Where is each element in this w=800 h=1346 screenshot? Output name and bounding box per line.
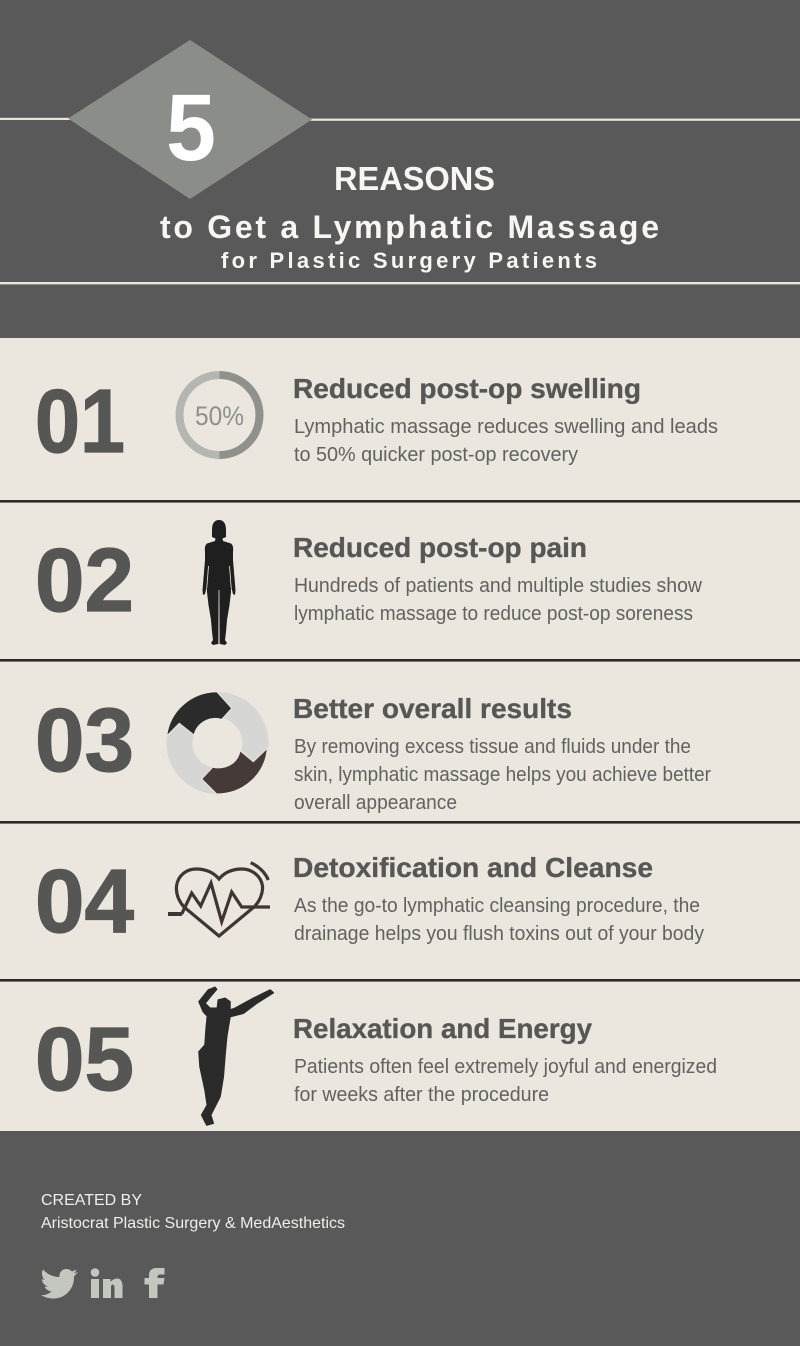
description: skin, lymphatic massage helps you achieve better: [294, 764, 711, 786]
reason 02: [35, 520, 703, 645]
reason 05: [35, 987, 717, 1125]
description: [294, 575, 703, 625]
credit text: [41, 1192, 345, 1232]
description: As the go-to lymphatic cleansing procedure, the: [294, 895, 700, 917]
number 02: 02: [35, 531, 134, 631]
description: drainage helps you flush toxins out of your body: [294, 923, 704, 945]
description: Lymphatic massage reduces swelling and leads: [294, 416, 718, 438]
title: to get a lymphatic massage: to Get a Lymphatic Massage: [160, 209, 659, 245]
description: By removing excess tissue and fluids under the: [294, 736, 691, 758]
description: [294, 895, 704, 945]
icon: circular arrows: [167, 692, 267, 794]
reason 03: [35, 691, 711, 814]
description: [294, 736, 711, 814]
heading: Reduced post-op pain: [293, 532, 587, 563]
icon: 50% progress ring: [180, 375, 260, 455]
description: Patients often feel extremely joyful and energized: [294, 1056, 717, 1078]
diamond badge: [68, 40, 312, 199]
number 01: 01: [35, 372, 125, 472]
icon: joyful figure silhouette: [199, 987, 273, 1125]
footer: [41, 1192, 345, 1298]
icon: linkedin: [91, 1268, 122, 1298]
credit text: Aristocrat Plastic Surgery & MedAesthetics: [41, 1215, 345, 1232]
icon: facebook: [144, 1268, 164, 1298]
big number 5: 5: [166, 75, 216, 181]
number 03: 03: [35, 691, 134, 791]
icon: female body silhouette: [202, 520, 236, 645]
content background: [0, 338, 800, 1131]
heading: Reduced post-op swelling: [293, 373, 641, 404]
reason 04: [35, 852, 704, 952]
description: lymphatic massage to reduce post-op soreness: [294, 603, 693, 625]
icon: 50% progress ring: 50%: [195, 401, 244, 431]
title: reasons: REASONS: [334, 160, 495, 197]
heading: Relaxation and Energy: [293, 1013, 592, 1044]
heading: Better overall results: [293, 693, 572, 724]
icon: twitter: [41, 1269, 78, 1298]
description: to 50% quicker post-op recovery: [294, 444, 578, 466]
reason 01: [35, 372, 718, 472]
number 05: 05: [35, 1010, 134, 1110]
description: Hundreds of patients and multiple studies show: [294, 575, 703, 597]
description: for weeks after the procedure: [294, 1084, 549, 1106]
subtitle: for Plastic Surgery Patients: [221, 248, 597, 273]
heading: Detoxification and Cleanse: [293, 852, 653, 883]
icon: heart with pulse: [168, 863, 270, 936]
description: overall appearance: [294, 792, 457, 814]
description: [294, 416, 718, 466]
description: [294, 1056, 717, 1106]
number 04: 04: [35, 852, 134, 952]
header: [0, 40, 800, 284]
credit text: CREATED BY: [41, 1192, 142, 1209]
